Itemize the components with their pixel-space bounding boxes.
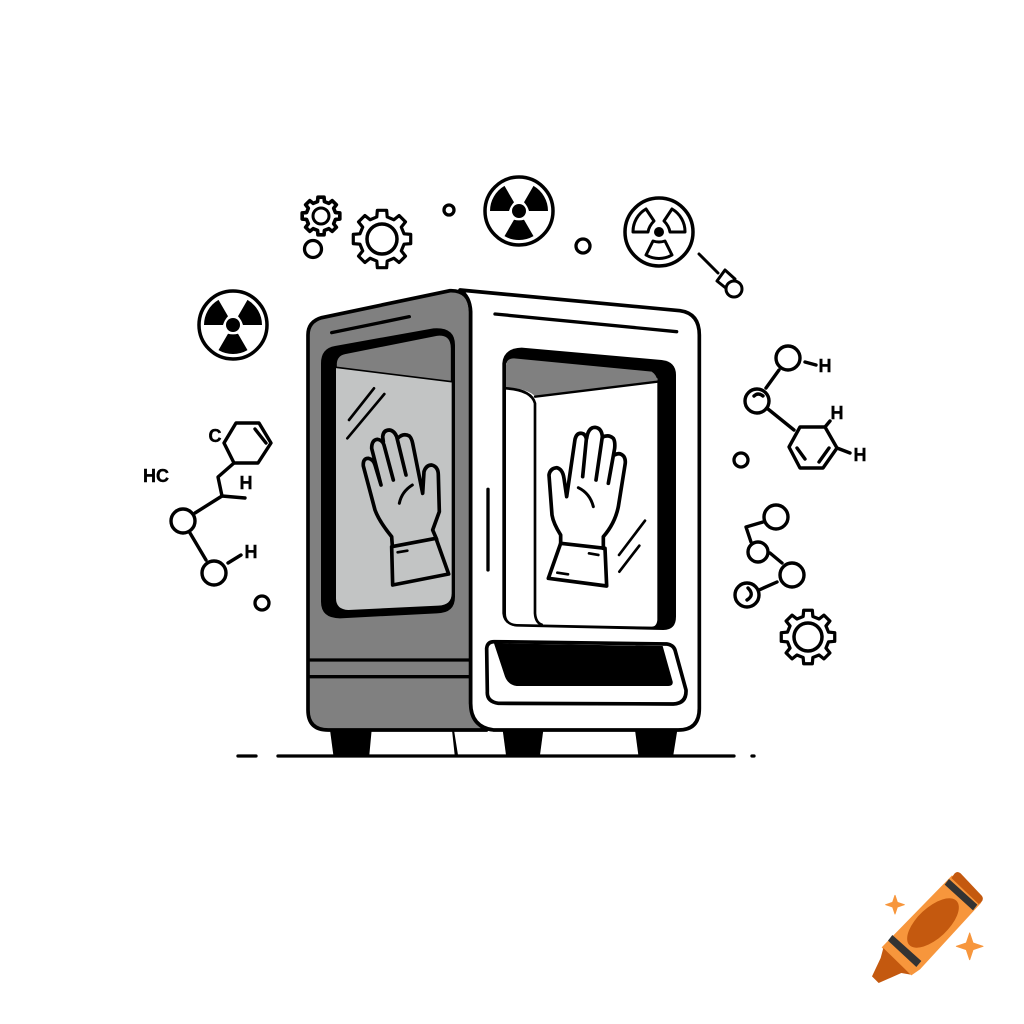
tray opening — [494, 643, 673, 686]
upper right molecule — [745, 346, 866, 468]
left molecule labels: HC — [143, 466, 169, 486]
right glove — [548, 427, 625, 586]
door handle bar — [483, 489, 493, 570]
crayon cap — [951, 872, 983, 904]
icon: solid radiation symbol left — [199, 291, 267, 359]
crayon body — [882, 875, 981, 975]
left molecule — [143, 423, 271, 585]
sparkles — [886, 895, 904, 914]
icon: lower right gear — [781, 610, 835, 664]
left window glare — [347, 388, 384, 438]
crayon bands — [888, 879, 977, 967]
left molecule labels: C — [208, 426, 222, 446]
right window interior — [506, 363, 657, 627]
crayon oval — [899, 890, 967, 956]
left glove — [363, 430, 449, 585]
right window glare — [619, 521, 645, 572]
icon: solid radiation symbol top — [485, 177, 553, 245]
upper right molecule labels: H — [830, 403, 844, 423]
crayon logo — [872, 872, 983, 983]
right window frame — [502, 348, 676, 630]
left panel top line — [332, 317, 409, 333]
icon: small gear — [302, 197, 340, 235]
upper right molecule labels: H — [818, 356, 832, 376]
lower right molecule — [735, 505, 804, 607]
ground line — [238, 754, 754, 758]
left molecule labels: H — [244, 542, 258, 562]
upper right molecule labels: H — [854, 445, 866, 465]
cabinet front panel — [460, 290, 699, 730]
left window glass — [336, 367, 452, 610]
cabinet left side panel — [308, 291, 487, 730]
front tray — [487, 642, 686, 704]
right window ceiling — [506, 358, 657, 397]
left panel stripes — [310, 660, 470, 677]
icon: outlined radiation symbol with probe — [625, 198, 742, 297]
left molecule labels: H — [240, 473, 252, 493]
glove box cabinet — [308, 290, 699, 755]
left window ceiling — [336, 335, 452, 382]
left molecule labels — [143, 426, 258, 562]
cabinet feet — [330, 730, 677, 755]
front panel top line — [495, 314, 677, 332]
left window frame — [321, 328, 455, 618]
icon: large gear — [353, 210, 411, 268]
crayon tip — [872, 948, 911, 983]
small bubbles — [255, 205, 748, 610]
right window inner wall — [506, 388, 542, 625]
upper right molecule labels — [818, 356, 866, 465]
